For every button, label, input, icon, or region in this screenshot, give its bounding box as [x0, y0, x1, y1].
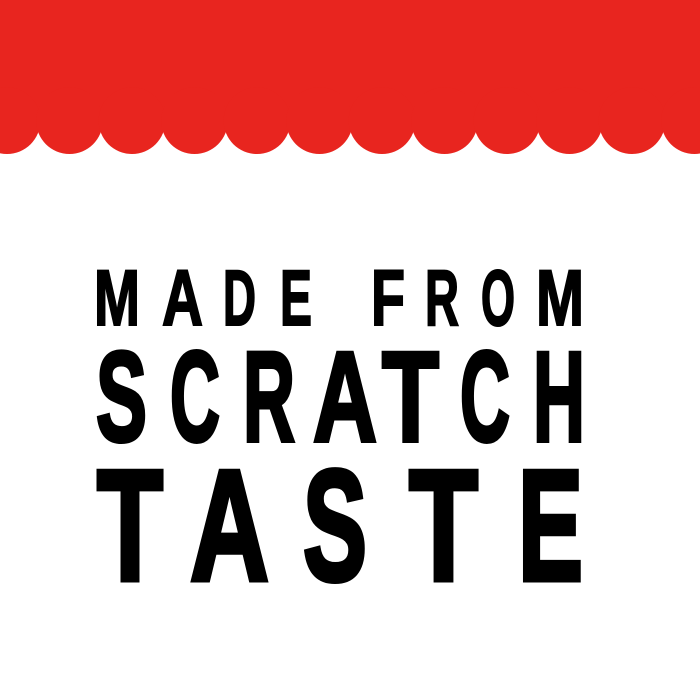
- line: MADE FROM: E: [280, 253, 312, 342]
- line: MADE FROM: M: [536, 253, 584, 342]
- line: MADE FROM: F: [371, 253, 405, 342]
- line: SCRATCH: T: [382, 326, 439, 469]
- line: SCRATCH: [96, 326, 585, 469]
- line: MADE FROM: R: [425, 253, 459, 342]
- line: SCRATCH: H: [533, 326, 585, 469]
- line: MADE FROM: [94, 253, 584, 342]
- line: TASTE: E: [518, 438, 583, 614]
- line: TASTE: S: [303, 438, 367, 614]
- line: TASTE: T: [97, 438, 163, 614]
- scalloped red awning: [0, 0, 700, 154]
- line: TASTE: T: [409, 438, 478, 614]
- line: TASTE: A: [190, 438, 269, 614]
- line: MADE FROM: M: [94, 253, 140, 342]
- line: MADE FROM: D: [223, 253, 256, 342]
- headline: [94, 253, 585, 614]
- line: SCRATCH: C: [460, 326, 510, 469]
- line: SCRATCH: A: [313, 326, 377, 469]
- line: MADE FROM: O: [481, 253, 515, 342]
- line: SCRATCH: S: [96, 326, 147, 469]
- line: MADE FROM: A: [162, 253, 203, 342]
- line: TASTE: [97, 438, 583, 614]
- line: SCRATCH: R: [243, 326, 295, 469]
- line: SCRATCH: C: [170, 326, 220, 469]
